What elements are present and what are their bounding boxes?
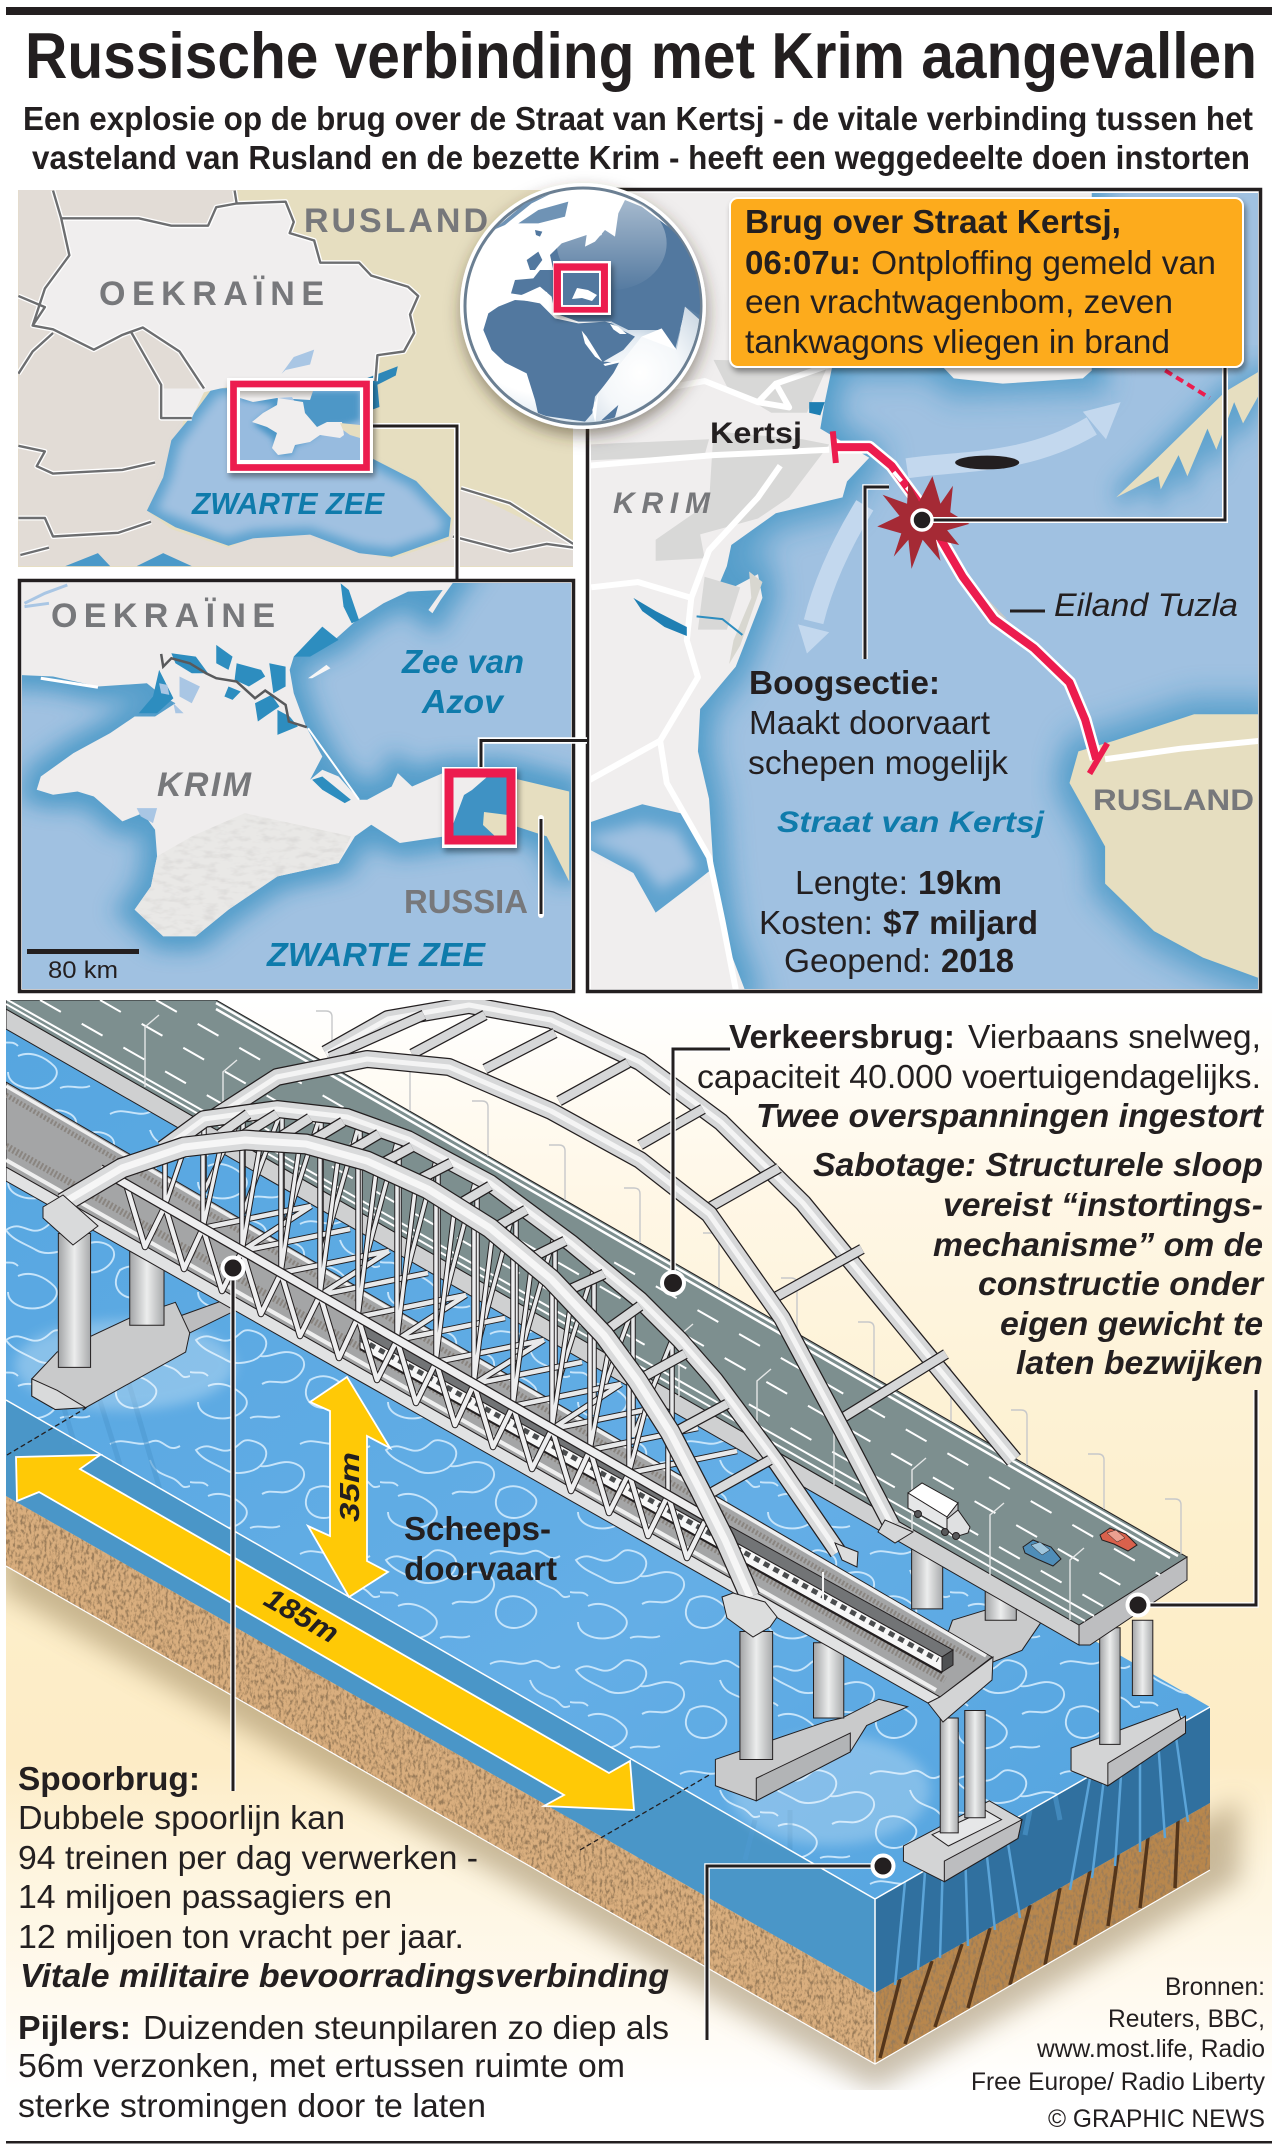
text: sabotage: mechanisme” om de: [933, 1227, 1263, 1264]
label: Eiland Tuzla: Eiland Tuzla: [1054, 587, 1238, 623]
callout: Boogsectie: [748, 487, 1009, 781]
text: piers: [18, 2009, 669, 2124]
text: railway bridge: Spoorbrug:: [18, 1760, 200, 1797]
text: road bridge: Verkeersbrug:: [729, 1019, 955, 1056]
text: railway bridge: 12 miljoen ton vracht per jaar.: [18, 1918, 464, 1955]
front pier caps: [722, 1593, 777, 1637]
text: sabotage: eigen gewicht te: [1000, 1306, 1263, 1343]
label: Russia: RUSSIA: [404, 883, 528, 920]
label: Straat van Kertsj: Straat van Kertsj: [777, 806, 1045, 839]
leader and marker: piers: [707, 1856, 894, 2040]
label: Scheepsdoorvaart: [405, 1516, 557, 1580]
scale bar: 80 km: [48, 957, 118, 984]
callout: explosion details: Brug over Straat Kertsj,: [745, 203, 1121, 240]
road deck: [6, 999, 1187, 1645]
sources credit: Reuters, BBC,: [1108, 2005, 1265, 2033]
label: Scheepsdoorvaart: Scheeps-: [404, 1510, 551, 1547]
label: Zwarte Zee: ZWARTE ZEE: [191, 486, 385, 521]
bottom rule: [6, 2141, 1272, 2144]
truck: [908, 1483, 970, 1540]
globe red box: [553, 261, 611, 315]
callout: explosion details: [730, 198, 1243, 367]
train: [360, 1321, 953, 1673]
callout: Boogsectie: Maakt doorvaart: [749, 704, 990, 741]
label: Zee van Azov: Azov: [421, 683, 505, 720]
label: Oekraine inset: OEKRAÏNE: [51, 597, 275, 635]
road bridge piers: [911, 1549, 1186, 1787]
explosion star: [877, 476, 969, 569]
label: Krim: KRIM: [613, 487, 711, 520]
text: sabotage: laten bezwijken: [1016, 1345, 1263, 1382]
callout: explosion details: Ontploffing gemeld van: [871, 244, 1216, 281]
block shadow: [6, 1566, 1254, 2090]
railway truss and arches: [43, 1109, 993, 1722]
label: Zee van Azov: [401, 643, 524, 720]
text: railway bridge: 94 treinen per dag verwerken -: [18, 1839, 478, 1876]
water surface: [6, 1016, 1210, 2064]
callout: explosion details: een vrachtwagenbom, zeven: [745, 283, 1173, 320]
arrow: span 185m: [16, 1455, 634, 1810]
connector: inset to strait map: [481, 740, 587, 770]
ground cross-section: earth: [6, 1496, 1210, 2064]
road bridge arches: [212, 1005, 1014, 1543]
text: sabotage: Sabotage: Structurele sloop: [813, 1147, 1263, 1184]
text: sabotage: constructie onder: [978, 1266, 1265, 1303]
label: Rusland: RUSLAND: [1093, 784, 1254, 817]
dashed span lines: [7, 1408, 711, 1850]
callout: explosion details: tankwagons vliegen in brand: [745, 323, 1170, 360]
facts: length cost opened: [759, 864, 1038, 979]
label: Zee van Azov: Zee van: [401, 643, 524, 680]
inset locator box: [442, 767, 517, 848]
panel: bridge illustration: [0, 999, 1272, 2090]
leader: Russia: [538, 818, 544, 915]
facts: length cost opened: Lengte:: [795, 864, 908, 901]
sources credit: Free Europe/ Radio Liberty: [971, 2068, 1265, 2096]
callout: Boogsectie: schepen mogelijk: [748, 744, 1009, 781]
label: Krim: KRIM: [157, 766, 252, 804]
icon: globe locator: [460, 183, 708, 429]
label: Rusland: RUSLAND: [304, 202, 488, 240]
railway deck: [6, 1082, 992, 1703]
lamp posts: [145, 1011, 1181, 1620]
panel: inset map Crimea: [16, 580, 573, 992]
text: sabotage: [813, 1147, 1265, 1382]
car blue: [1023, 1540, 1061, 1566]
facts: length cost opened: Geopend:: [784, 942, 931, 979]
leader and marker: railway bridge: [222, 1258, 244, 1791]
facts: length cost opened: 2018: [941, 942, 1014, 979]
bridge route: [833, 431, 1107, 774]
text: railway bridge: [18, 1760, 669, 1994]
text: piers: Duizenden steunpilaren zo diep als: [143, 2009, 669, 2046]
callout: explosion details: 06:07u:: [745, 244, 861, 281]
sources credit: © GRAPHIC NEWS: [1048, 2105, 1265, 2133]
panel: Kerch Strait map: [588, 188, 1261, 992]
subtitle: Een explosie op de brug over de Straat van Kertsj - de vitale verbinding tussen het: [23, 100, 1253, 137]
text: road bridge: [697, 1019, 1265, 1135]
text: road bridge: capaciteit 40.000 voertuigendagelijks.: [697, 1059, 1261, 1096]
facts: length cost opened: $7 miljard: [883, 904, 1038, 941]
scale bar: [27, 949, 139, 984]
facts: length cost opened: 19km: [918, 864, 1002, 901]
text: piers: Pijlers:: [18, 2009, 131, 2046]
text: railway bridge: 14 miljoen passagiers en: [18, 1878, 392, 1915]
arrow: clearance 35m: [308, 1377, 390, 1597]
car red: [1100, 1528, 1137, 1551]
railway piers: [715, 1631, 1022, 1882]
text: railway bridge: Vitale militaire bevoorradingsverbinding: [20, 1957, 669, 1994]
leader and marker: road pier: [1128, 1390, 1256, 1616]
text: sabotage: vereist “instortings-: [943, 1187, 1263, 1224]
sources credit: Bronnen:: [1165, 1973, 1265, 2001]
arrow: clearance 35m: 35m: [334, 1452, 365, 1522]
label: Zwarte Zee inset: ZWARTE ZEE: [266, 936, 486, 973]
leader and marker: road bridge: [662, 1049, 730, 1294]
panel: regional map Black Sea: [18, 189, 573, 580]
arrow: span 185m: 185m: [258, 1582, 344, 1650]
callout: Boogsectie: Boogsectie:: [749, 664, 940, 701]
text: railway bridge: Dubbele spoorlijn kan: [18, 1799, 345, 1836]
red locator box: Crimea: [227, 378, 373, 473]
label: Oekraine: OEKRAÏNE: [99, 275, 324, 313]
text: road bridge: Twee overspanningen ingestort: [756, 1098, 1265, 1135]
sources credit: [971, 1973, 1265, 2133]
text: road bridge: Vierbaans snelweg,: [968, 1019, 1261, 1056]
connector lines overview to inset: [373, 426, 457, 580]
facts: length cost opened: Kosten:: [759, 904, 873, 941]
leader and marker: explosion: [912, 360, 1225, 530]
water front faces: [6, 1400, 1210, 1993]
text: piers: sterke stromingen door te laten: [18, 2087, 486, 2124]
text: piers: 56m verzonken, met ertussen ruimte om: [18, 2047, 625, 2084]
sources credit: www.most.life, Radio: [1036, 2035, 1265, 2063]
subtitle: vasteland van Rusland en de bezette Krim - heeft een weggedeelte doen instorten: [32, 139, 1250, 176]
label: Kertsj: Kertsj: [710, 417, 802, 450]
subtitle: [23, 100, 1253, 176]
left pier cap: [43, 1195, 98, 1245]
connector to inset: [371, 426, 457, 580]
top rule: [6, 7, 1272, 15]
label: Scheepsdoorvaart: doorvaart: [404, 1550, 557, 1587]
